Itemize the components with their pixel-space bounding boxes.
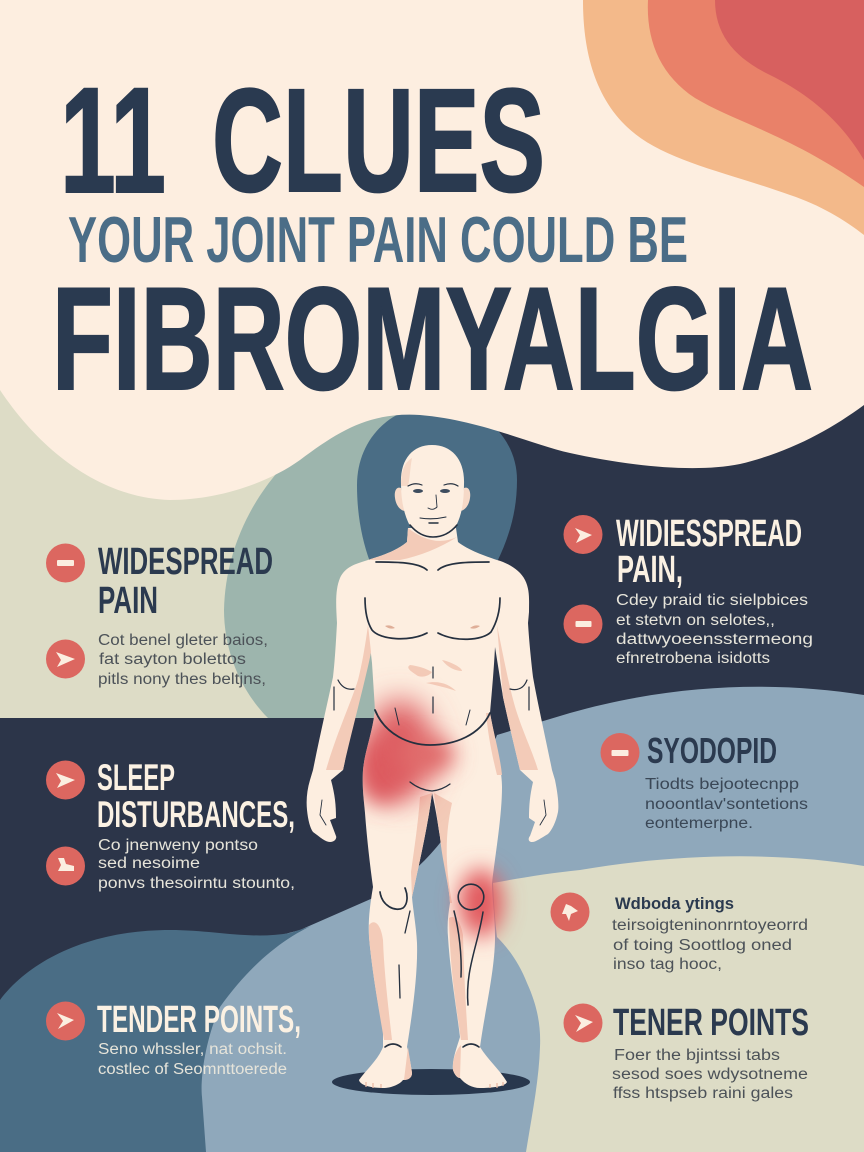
decorative blob: peach xyxy=(583,0,864,235)
body text xyxy=(612,917,808,973)
body text xyxy=(98,837,295,892)
title: 11 clues: CLUES xyxy=(212,59,545,223)
body text: eontemerpne. xyxy=(645,815,753,832)
background: teal halo behind head xyxy=(357,405,517,562)
icon: minus badge xyxy=(564,604,602,644)
pain glow: knee xyxy=(459,869,503,937)
heading: SYODOPID xyxy=(647,730,777,771)
icon: arrow badge xyxy=(46,846,85,886)
panel: widespread pain, left xyxy=(46,541,273,688)
body text: fat sayton bolettos xyxy=(99,651,246,668)
body text xyxy=(645,776,808,832)
decorative blob: red xyxy=(715,0,864,160)
panel: syodopid xyxy=(600,730,808,832)
heading second line: PAIN xyxy=(98,580,158,622)
figure: human body with pain areas xyxy=(307,445,558,1095)
body text: et stetvn on selotes,, xyxy=(616,612,775,629)
panel: wdboda yting xyxy=(550,892,808,973)
background: blue-grey wave xyxy=(0,687,864,1152)
panel: tener points xyxy=(564,1002,809,1102)
panel: tender points, left xyxy=(46,999,301,1078)
body text: dattwyoeensstermeong xyxy=(616,631,813,648)
body text xyxy=(612,1047,808,1102)
background: green arc xyxy=(224,400,400,718)
panel: sleep disturbances xyxy=(46,757,295,892)
body text: Cdey praid tic sielpbices xyxy=(616,592,808,609)
body text: nooontlav'sontetions xyxy=(645,796,808,813)
heading: TENDER POINTS, xyxy=(97,999,301,1041)
body text: Seno whssler, nat ochsit. xyxy=(98,1041,287,1058)
torso and legs xyxy=(359,528,507,1088)
body text: pitls nony thes beltjns, xyxy=(98,671,266,688)
icon: arrow badge xyxy=(564,1004,602,1042)
background: lower-right sage shape xyxy=(493,856,864,1152)
icon: minus badge xyxy=(600,733,640,772)
heading: Wdboda ytings xyxy=(615,894,734,913)
body text: Co jnenweny pontso xyxy=(98,837,258,854)
body text: sesod soes wdysotneme xyxy=(612,1066,808,1083)
icon: arrow badge xyxy=(46,760,85,800)
icon: minus badge xyxy=(46,544,85,582)
ears xyxy=(395,488,470,511)
icon: star badge xyxy=(550,892,590,932)
heading second line: PAIN, xyxy=(617,549,683,591)
pain glow: abdomen and hip xyxy=(358,700,455,804)
body text: ffss htspseb raini gales xyxy=(613,1085,793,1102)
ground shadow xyxy=(332,1069,530,1095)
body text xyxy=(616,592,813,667)
skull and face xyxy=(401,445,464,538)
body text: Cot benel gleter baios, xyxy=(98,632,268,649)
body text: ponvs thesoirntu stounto, xyxy=(98,875,295,892)
icon: arrow badge xyxy=(564,515,602,554)
body text: Tiodts bejootecnpp xyxy=(645,776,799,793)
body text xyxy=(98,632,268,688)
icon: arrow badge xyxy=(46,1002,85,1040)
background: sage left panel xyxy=(0,360,380,718)
body text: teirsoigteninonrntoyeorrd xyxy=(612,917,808,934)
body text: efnretrobena isidotts xyxy=(616,650,770,667)
title: 11 clues: 11 xyxy=(60,56,166,224)
facial features xyxy=(401,458,458,537)
heading second line: DISTURBANCES, xyxy=(97,794,295,835)
right arm and hand xyxy=(490,560,558,842)
title: 11 clues xyxy=(60,56,545,224)
body text xyxy=(98,1041,287,1078)
body text: Foer the bjintssi tabs xyxy=(614,1047,780,1064)
body text: costlec of Seomnttoerede xyxy=(98,1061,287,1078)
background: lower blue-grey circle xyxy=(202,920,400,1152)
body text: of toing Soottlog oned xyxy=(613,937,792,954)
heading: WIDESPREAD xyxy=(98,541,273,583)
background: cream header wave xyxy=(0,0,864,500)
head xyxy=(395,445,470,538)
panel: widespread pain, right xyxy=(564,513,813,667)
body text: inso tag hooc, xyxy=(613,956,722,973)
left arm and hand xyxy=(307,560,375,842)
background: lower-left teal shape xyxy=(0,920,330,1152)
shading: arms, thighs, calves xyxy=(326,528,538,1080)
icon: arrow badge xyxy=(46,640,85,678)
heading: SLEEP xyxy=(97,757,175,798)
anatomy lines xyxy=(320,562,546,1088)
body text: sed nesoime xyxy=(98,855,200,872)
decorative blob: coral xyxy=(648,0,864,187)
